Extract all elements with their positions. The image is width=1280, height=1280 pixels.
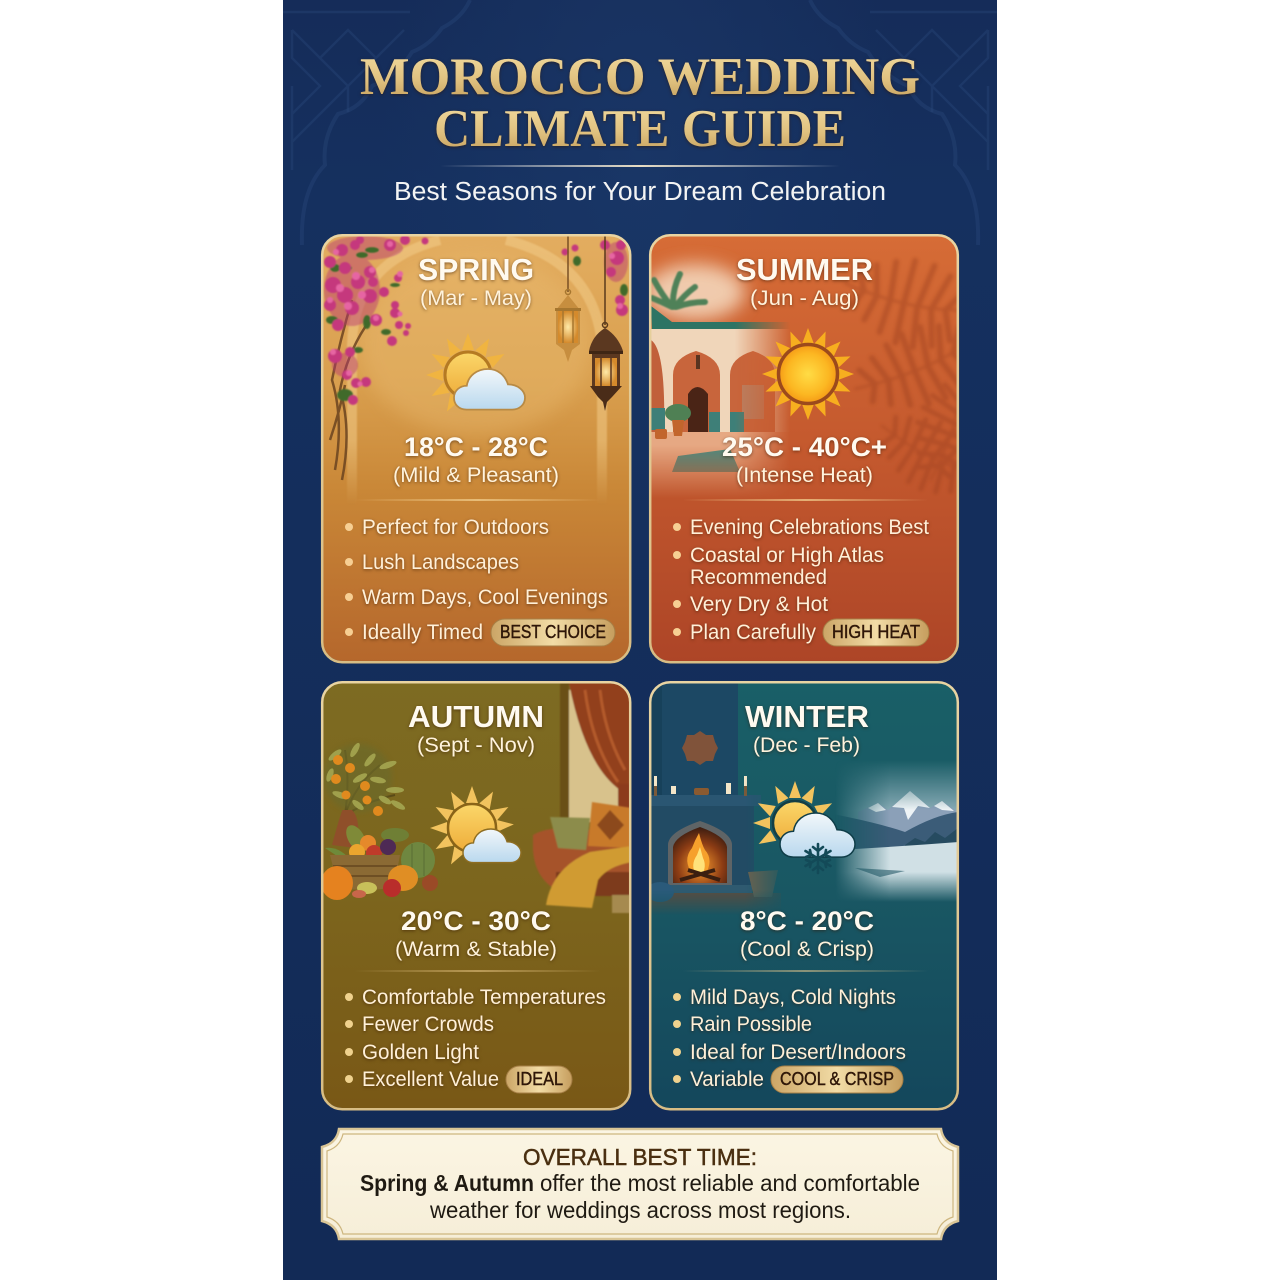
- autumn temperature note: (Warm & Stable): [395, 938, 557, 961]
- autumn list: [345, 986, 606, 1091]
- callout heading: OVERALL BEST TIME:: [523, 1144, 757, 1170]
- lantern: gold: [555, 236, 581, 362]
- badge: best choice: [491, 619, 615, 646]
- autumn heading: AUTUMN: [408, 699, 544, 734]
- autumn list: Golden Light: [362, 1041, 479, 1064]
- spring heading: SPRING: [418, 252, 534, 287]
- icon: sun and cloud: [426, 333, 525, 414]
- spring temperature: 18°C - 28°C: [404, 432, 548, 462]
- autumn temperature: 20°C - 30°C: [401, 906, 551, 936]
- title: [360, 48, 920, 158]
- summer list: Very Dry & Hot: [690, 593, 828, 616]
- background panel: [283, 0, 997, 1280]
- autumn months: (Sept - Nov): [417, 734, 535, 757]
- spring months: (Mar - May): [420, 287, 532, 310]
- winter illustration: [646, 682, 970, 1109]
- autumn illustration: [321, 682, 634, 1109]
- title: CLIMATE GUIDE: [434, 100, 846, 158]
- subtitle: Best Seasons for Your Dream Celebration: [394, 178, 886, 206]
- callout text: weather for weddings across most regions.: [429, 1197, 851, 1223]
- summer months: (Jun - Aug): [750, 287, 859, 310]
- badge: ideal: IDEAL: [516, 1069, 563, 1089]
- winter list: [673, 986, 906, 1091]
- panel: autumn: [321, 682, 634, 1109]
- autumn list: Comfortable Temperatures: [362, 986, 606, 1009]
- bougainvillea: [324, 235, 628, 405]
- icon: blazing sun: [762, 328, 854, 420]
- badge: cool and crisp: COOL & CRISP: [780, 1069, 894, 1089]
- winter heading: WINTER: [745, 699, 869, 734]
- summer temperature note: (Intense Heat): [736, 464, 873, 487]
- callout: overall best time: [322, 1129, 958, 1239]
- spring temperature note: (Mild & Pleasant): [393, 464, 559, 487]
- summer list: Coastal or High Atlas: [690, 544, 884, 567]
- icon: sun and cloud: [430, 786, 521, 867]
- mountains and snow: [838, 764, 957, 900]
- panel: spring: [322, 235, 632, 662]
- winter list: Variable: [690, 1068, 764, 1091]
- winter temperature: 8°C - 20°C: [740, 906, 874, 936]
- winter months: (Dec - Feb): [753, 734, 860, 757]
- autumn list: Excellent Value: [362, 1068, 499, 1091]
- fruit basket: [321, 810, 438, 900]
- palm shadow: [845, 258, 956, 494]
- summer heading: SUMMER: [736, 252, 873, 287]
- summer list: Recommended: [690, 566, 827, 589]
- winter list: Ideal for Desert/Indoors: [690, 1041, 906, 1064]
- panel: winter: [646, 682, 970, 1109]
- callout text: Spring & Autumn: [360, 1170, 534, 1196]
- winter list: Mild Days, Cold Nights: [690, 986, 896, 1009]
- spring list: Perfect for Outdoors: [362, 516, 549, 539]
- badge: cool and crisp: [771, 1066, 903, 1093]
- spring illustration: [322, 235, 632, 662]
- summer temperature: 25°C - 40°C+: [722, 432, 887, 462]
- badge: ideal: [506, 1066, 572, 1093]
- title: MOROCCO WEDDING: [360, 48, 920, 106]
- icon: snowflake: [806, 844, 830, 873]
- spring list: Lush Landscapes: [362, 551, 519, 574]
- sofa: [533, 802, 634, 913]
- badge: best choice: BEST CHOICE: [500, 622, 606, 642]
- autumn list: Fewer Crowds: [362, 1013, 494, 1036]
- lantern: bronze: [589, 236, 623, 411]
- orange tree: [324, 742, 406, 816]
- spring list: Ideally Timed: [362, 621, 483, 644]
- summer list: [673, 516, 929, 644]
- badge: high heat: [823, 619, 929, 646]
- callout text: [360, 1170, 920, 1223]
- callout text: offer the most reliable and comfortable: [540, 1170, 920, 1196]
- winter temperature note: (Cool & Crisp): [740, 938, 874, 961]
- spring list: [345, 516, 608, 644]
- spring list: Warm Days, Cool Evenings: [362, 586, 608, 609]
- winter list: Rain Possible: [690, 1013, 812, 1036]
- window and curtain: [560, 683, 632, 823]
- courtyard: [651, 306, 788, 492]
- fireplace: [646, 683, 781, 915]
- badge: high heat: HIGH HEAT: [832, 622, 920, 642]
- summer illustration: [651, 236, 957, 661]
- summer list: Plan Carefully: [690, 621, 816, 644]
- summer list: Evening Celebrations Best: [690, 516, 929, 539]
- panel: summer: [648, 234, 960, 664]
- palm: [652, 274, 705, 307]
- icon: sun, cloud and snowflake: [753, 781, 855, 873]
